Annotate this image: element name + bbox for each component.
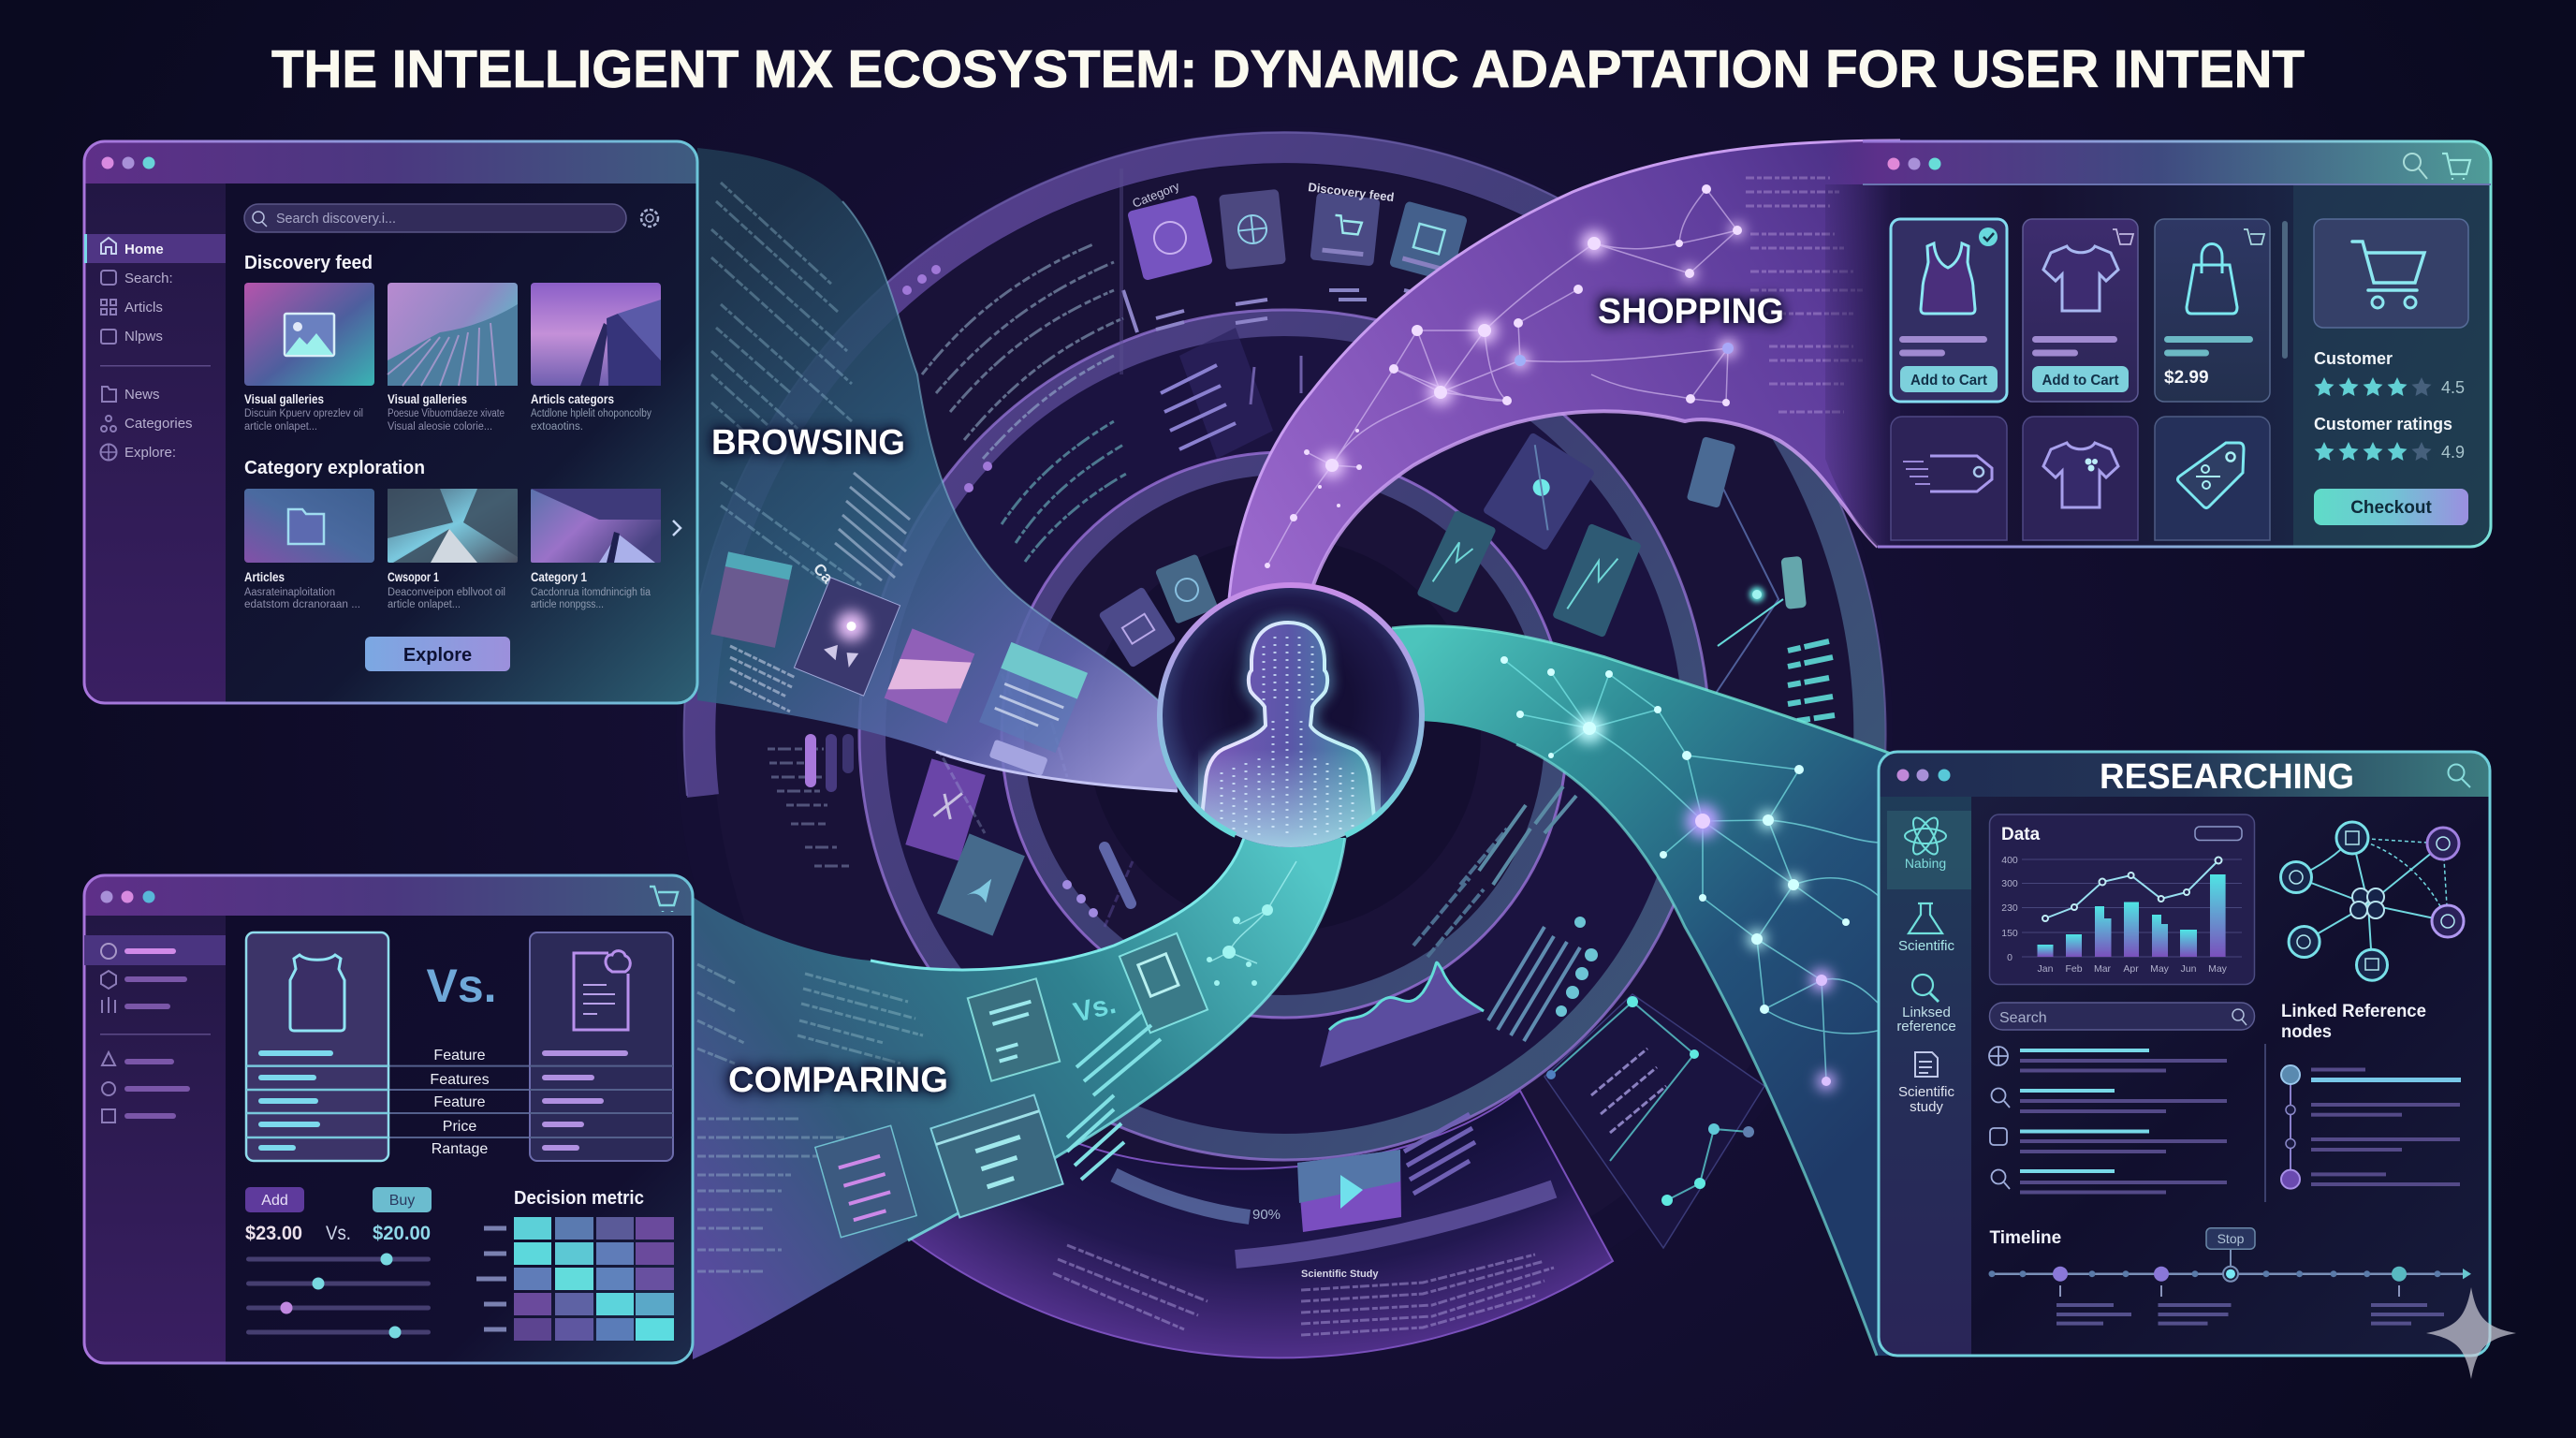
sidebar nav: News	[124, 387, 160, 403]
panel: researching window	[1879, 752, 2490, 1356]
price comparison: Vs.	[326, 1223, 351, 1244]
ribbon text stack	[730, 646, 796, 712]
sidebar navigation: study	[1910, 1099, 1943, 1115]
price comparison	[245, 1223, 431, 1244]
feature labels: Feature	[433, 1048, 486, 1064]
sliders	[246, 1253, 431, 1339]
feature labels	[430, 1048, 490, 1157]
card: visual galleries 1: article onlapet...	[244, 421, 317, 433]
button: add	[245, 1187, 304, 1212]
comparing nodes	[1207, 904, 1273, 986]
button: explore	[365, 637, 510, 671]
shopping nodes glow	[1319, 223, 1745, 478]
ring right card 3	[1416, 510, 1497, 613]
chart: data bars and line: 0	[2007, 952, 2012, 963]
scrollbar	[2282, 221, 2288, 359]
comparison table lines	[246, 1066, 673, 1137]
card: article categories	[531, 283, 661, 433]
heading: discovery feed: Discovery feed	[244, 253, 373, 273]
ribbon card: image middle	[885, 628, 974, 724]
ring inner card 2	[1155, 553, 1218, 624]
study title: Scientific Study	[1301, 1269, 1379, 1280]
ribbon text column	[835, 473, 910, 580]
price comparison: $23.00	[245, 1223, 302, 1244]
comparison product card A	[246, 932, 388, 1161]
card: category 1 abstract: Cacdonrua itomdnincigh tia	[531, 587, 651, 598]
heading: researching: RESEARCHING	[2100, 757, 2354, 797]
ring left code	[768, 674, 1133, 927]
researching nodes	[1500, 656, 1850, 1086]
card: visual galleries 2: Visual aleosie colorie...	[388, 421, 492, 433]
chart: data bars and line: 300	[2001, 878, 2018, 889]
shopping nodes	[1265, 184, 1742, 568]
sidebar nav: Categories	[124, 416, 193, 432]
ring code text: top left	[922, 243, 1128, 562]
feature labels: Rantage	[432, 1141, 488, 1157]
card: category 1 city	[388, 489, 518, 610]
card: tank top selected: Add to Cart	[1910, 373, 1988, 389]
heading: linked reference nodes	[2281, 1002, 2426, 1042]
heading: category exploration: Category exploration	[244, 458, 425, 478]
bottom panel: media and study	[889, 994, 1764, 1357]
sidebar navigation: reference	[1896, 1019, 1956, 1034]
ribbon: browsing flow	[697, 148, 1178, 791]
feature labels: Feature	[433, 1094, 486, 1110]
comparing list lines	[1067, 1011, 1161, 1180]
card: article categories: Actdlone hplelit ohoponcolby	[531, 408, 651, 419]
ring lower-left bars	[811, 740, 1131, 903]
comparing panel card left	[815, 1125, 916, 1238]
search field	[1990, 1003, 2254, 1030]
chart in ring	[1320, 962, 1484, 1067]
callout: stop	[2206, 1228, 2255, 1266]
shopping code text	[1746, 178, 1863, 412]
chart: data bars and line: May	[2208, 963, 2228, 975]
card: discount tag	[2155, 417, 2270, 540]
customer rating: 4.5	[2441, 378, 2465, 397]
card: article categories: extoaotins.	[531, 421, 583, 433]
ring label: category: Category	[1131, 179, 1181, 211]
chart: data bars and line: Data	[2001, 825, 2041, 844]
card: articles: edatstom dcranoraan ...	[244, 599, 360, 610]
card: printed t-shirt	[2023, 417, 2138, 540]
label: browsing: BROWSING	[711, 423, 905, 462]
video card	[1297, 1150, 1401, 1232]
sidebar navigation: Scientific	[1898, 938, 1955, 954]
button: explore: Explore	[403, 645, 472, 666]
customer ratings: 4.9	[2441, 443, 2465, 462]
sidebar nav: Explore:	[124, 445, 176, 461]
ribbon code text	[711, 183, 861, 595]
vs label: Vs.	[426, 960, 497, 1012]
comparison product card B	[530, 932, 673, 1161]
ring inner cards	[1098, 586, 1177, 668]
card: tank top selected	[1891, 219, 2007, 402]
panel: comparing window	[84, 875, 693, 1363]
chart: data bars and line: Jan	[2038, 963, 2054, 975]
card: category 1 abstract: article nonpgss...	[531, 599, 604, 610]
sidebar nav	[84, 935, 226, 1123]
ribbon: comparing flow	[693, 838, 1345, 1359]
card: visual galleries 1: Discuin Kpuerv oprezlev oil	[244, 408, 363, 419]
sidebar navigation: Nabing	[1905, 856, 1946, 871]
card: articles: Aasrateinaploitation	[244, 587, 335, 598]
ring right node column	[1687, 436, 1835, 721]
card: visual galleries 2: Poesue Vibuomdaeze xivate	[388, 408, 505, 419]
button: buy: Buy	[389, 1193, 415, 1209]
button: checkout	[2314, 489, 2468, 525]
card: shopping bag	[2155, 219, 2270, 402]
card: visual galleries 2	[388, 283, 518, 433]
ring window dots	[902, 265, 992, 492]
ring label: discovery feed: Discovery feed	[1308, 180, 1395, 204]
chart: data bars and line: May	[2150, 963, 2170, 975]
card: visual galleries 2: Visual galleries	[388, 392, 467, 406]
card: category 1 abstract: Category 1	[531, 570, 587, 584]
ribbon card button	[989, 740, 1048, 776]
video text lines	[1404, 1114, 1475, 1194]
researching network lines	[1504, 660, 1881, 1081]
study text	[1053, 1245, 1554, 1335]
result list	[1989, 1047, 2227, 1195]
heading: timeline: Timeline	[1990, 1228, 2061, 1248]
central user circle	[1160, 585, 1422, 852]
chart: data bars and line	[1990, 814, 2254, 985]
card: category 1 city: article onlapet...	[388, 599, 461, 610]
button: add: Add	[261, 1193, 288, 1209]
ring card: cart	[1310, 193, 1381, 266]
panel: shopping window	[1825, 141, 2491, 547]
icon: chevron	[673, 521, 681, 536]
ring lower-left card 2	[937, 833, 1025, 936]
comparing panel card right	[930, 1095, 1063, 1217]
concentric interface rings	[676, 126, 1893, 1343]
window dots	[101, 157, 155, 169]
chart: data bars and line: Apr	[2123, 963, 2139, 975]
icon: cart	[2442, 154, 2470, 180]
reference timeline	[2265, 1044, 2461, 1202]
chart: data bars and line: 230	[2001, 902, 2018, 914]
window dots	[1887, 157, 1941, 170]
card: visual galleries 1	[244, 283, 374, 433]
sidebar navigation	[1887, 811, 1971, 1115]
button: buy	[373, 1187, 432, 1212]
sidebar navigation: Scientific	[1898, 1084, 1955, 1100]
comparing doc card	[1120, 933, 1208, 1033]
customer rating	[2314, 349, 2465, 397]
person silhouette	[1198, 623, 1381, 852]
sidebar nav: Home	[124, 242, 164, 257]
feature labels: Price	[443, 1119, 476, 1135]
ring dots lower right	[1556, 917, 1598, 1017]
comparing code text	[697, 964, 923, 1271]
card: article categories: Articls categors	[531, 392, 614, 406]
heading: linked reference nodes: Linked Reference	[2281, 1002, 2426, 1021]
outer graph	[1546, 996, 1754, 1206]
ring card columns	[1120, 169, 1437, 459]
label: shopping: SHOPPING	[1598, 292, 1784, 331]
icon: sparkle watermark	[2426, 1287, 2516, 1379]
heading: decision metric: Decision metric	[514, 1188, 644, 1209]
card: articles: Articles	[244, 570, 285, 584]
ring lower-left cards	[905, 758, 986, 861]
network: linked reference graph	[2280, 822, 2464, 980]
comparing neural sparks	[1210, 861, 1296, 963]
card: t-shirt: Add to Cart	[2042, 373, 2119, 389]
search field: Search	[1999, 1010, 2047, 1026]
ring card: globe	[1219, 189, 1286, 270]
shopping network lines	[1267, 189, 1737, 565]
researching nodes glow	[1574, 713, 1836, 1091]
ring dots lower left	[1062, 880, 1098, 917]
chart: data bars and line: 400	[2001, 855, 2018, 866]
sidebar nav: Articls	[124, 300, 163, 315]
panel: browsing discovery window	[84, 141, 697, 703]
timeline band	[1236, 1189, 1554, 1259]
label: comparing: COMPARING	[728, 1061, 948, 1100]
ribbon label: category: Category	[810, 560, 870, 624]
large cart tile	[2314, 219, 2468, 328]
ring card: image	[1389, 200, 1468, 283]
ring lower-right cards	[1413, 786, 1580, 1041]
ring right card 2	[1552, 523, 1642, 638]
customer ratings: Customer ratings	[2314, 415, 2452, 433]
feature labels: Features	[430, 1072, 490, 1088]
comparing card	[968, 978, 1060, 1081]
chart: data bars and line: Feb	[2065, 963, 2083, 975]
ribbon: shopping flow	[1229, 140, 1900, 599]
ring right card 1	[1483, 432, 1595, 551]
icon: settings gear	[641, 210, 658, 227]
ribbon card: teal lines	[979, 642, 1088, 753]
card: visual galleries 1: Visual galleries	[244, 392, 324, 406]
ribbon: researching flow	[1392, 626, 1891, 1356]
icon: search	[2404, 154, 2427, 179]
sidebar nav: Nlpws	[124, 329, 163, 345]
progress bar	[1114, 1175, 1250, 1217]
price comparison: $20.00	[373, 1223, 431, 1244]
comparing vs text: Vs.	[1071, 989, 1119, 1029]
window dots	[101, 891, 155, 902]
sidebar nav: Search:	[124, 271, 173, 286]
title: THE INTELLIGENT MX ECOSYSTEM: DYNAMIC ADAPTATION FOR USER INTENT	[271, 39, 2305, 99]
timeline axis	[1988, 1267, 2471, 1324]
customer ratings	[2314, 415, 2465, 462]
card: articles	[244, 489, 374, 610]
chart: data bars and line: Mar	[2094, 963, 2112, 975]
icon: cart	[650, 887, 678, 912]
heading: linked reference nodes: nodes	[2281, 1022, 2332, 1042]
icon: search	[2449, 764, 2470, 787]
chart: data bars and line: Jun	[2181, 963, 2197, 975]
90 percent: 90%	[1252, 1207, 1281, 1223]
card: category 1 abstract	[531, 489, 661, 610]
search bar	[244, 204, 626, 232]
search bar: Search discovery.i...	[276, 211, 396, 227]
chart: data bars and line: 150	[2001, 928, 2018, 939]
callout: stop: Stop	[2217, 1231, 2245, 1246]
card: price tag	[1891, 417, 2007, 540]
ribbon card: spark	[794, 578, 900, 696]
sidebar nav	[84, 234, 226, 461]
sidebar navigation: Linksed	[1902, 1005, 1951, 1020]
card: category 1 city: Deaconveipon ebllvoot oil	[388, 587, 505, 598]
card: shopping bag: $2.99	[2164, 368, 2209, 388]
button: checkout: Checkout	[2350, 498, 2432, 518]
customer rating: Customer	[2314, 349, 2393, 368]
decision heatmap	[476, 1217, 674, 1341]
window dots	[1896, 770, 1951, 781]
card: t-shirt	[2023, 219, 2138, 402]
card: category 1 city: Cwsopor 1	[388, 570, 439, 584]
ring card: category	[1127, 195, 1213, 281]
ribbon card: image left	[710, 551, 793, 648]
